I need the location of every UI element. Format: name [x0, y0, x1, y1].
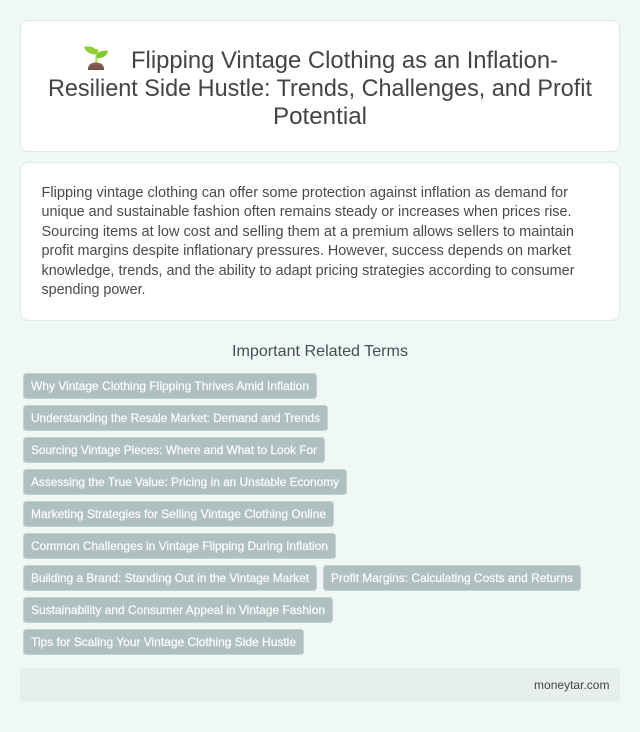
heading: important related terms: Important Related Terms: [232, 343, 408, 360]
tag: building a brand: [24, 566, 316, 590]
tag: marketing: [24, 502, 334, 526]
summary text: profit margins despite inflationary pressures. However, success depends on market: [42, 243, 571, 259]
tag: challenges: [24, 534, 336, 558]
summary text: Sourcing items at low cost and selling them at a premium allows sellers to maintain: [42, 224, 574, 240]
tag: why vintage thrives: Why Vintage Clothing Flipping Thrives Amid Inflation: [31, 379, 309, 393]
tag: sustainability: Sustainability and Consumer Appeal in Vintage Fashion: [31, 603, 325, 617]
tag: profit margins: [324, 566, 580, 590]
tag: marketing: Marketing Strategies for Selling Vintage Clothing Online: [31, 507, 326, 521]
summary text: spending power.: [42, 282, 146, 298]
tag: assessing value: Assessing the True Value: Pricing in an Unstable Economy: [31, 475, 339, 489]
tag list: [24, 374, 580, 654]
tag: assessing value: [24, 470, 346, 494]
tag: sourcing: Sourcing Vintage Pieces: Where and What to Look For: [31, 443, 317, 457]
tag: sustainability: [24, 598, 332, 622]
tag: scaling: Tips for Scaling Your Vintage Clothing Side Hustle: [31, 635, 296, 649]
footer bar: [20, 668, 620, 702]
tag: scaling: [24, 630, 304, 654]
tag: profit margins: Profit Margins: Calculating Costs and Returns: [331, 571, 573, 585]
tag: resale market: [24, 406, 328, 430]
footer bar: moneytar.com: [534, 678, 610, 692]
tag: why vintage thrives: [24, 374, 316, 398]
panel: summary paragraph: [20, 162, 620, 320]
summary text: [42, 185, 575, 298]
tag: resale market: Understanding the Resale Market: Demand and Trends: [31, 411, 320, 425]
title text: Resilient Side Hustle: Trends, Challenges, and Profit: [48, 75, 592, 102]
icon: sprout: [84, 46, 108, 70]
tag: building a brand: Building a Brand: Standing Out in the Vintage Market: [31, 571, 310, 585]
summary text: Flipping vintage clothing can offer some protection against inflation as demand for: [42, 185, 568, 201]
tag: sourcing: [24, 438, 324, 462]
summary text: knowledge, trends, and the ability to adapt pricing strategies according to consumer: [42, 263, 575, 279]
tag: challenges: Common Challenges in Vintage Flipping During Inflation: [31, 539, 328, 553]
summary text: unique and sustainable fashion often remains steady or increases when prices rise.: [42, 204, 572, 220]
title text: [48, 47, 592, 130]
panel: title card: [20, 20, 620, 152]
title text: Flipping Vintage Clothing as an Inflation-: [131, 47, 558, 74]
title text: Potential: [273, 103, 367, 130]
